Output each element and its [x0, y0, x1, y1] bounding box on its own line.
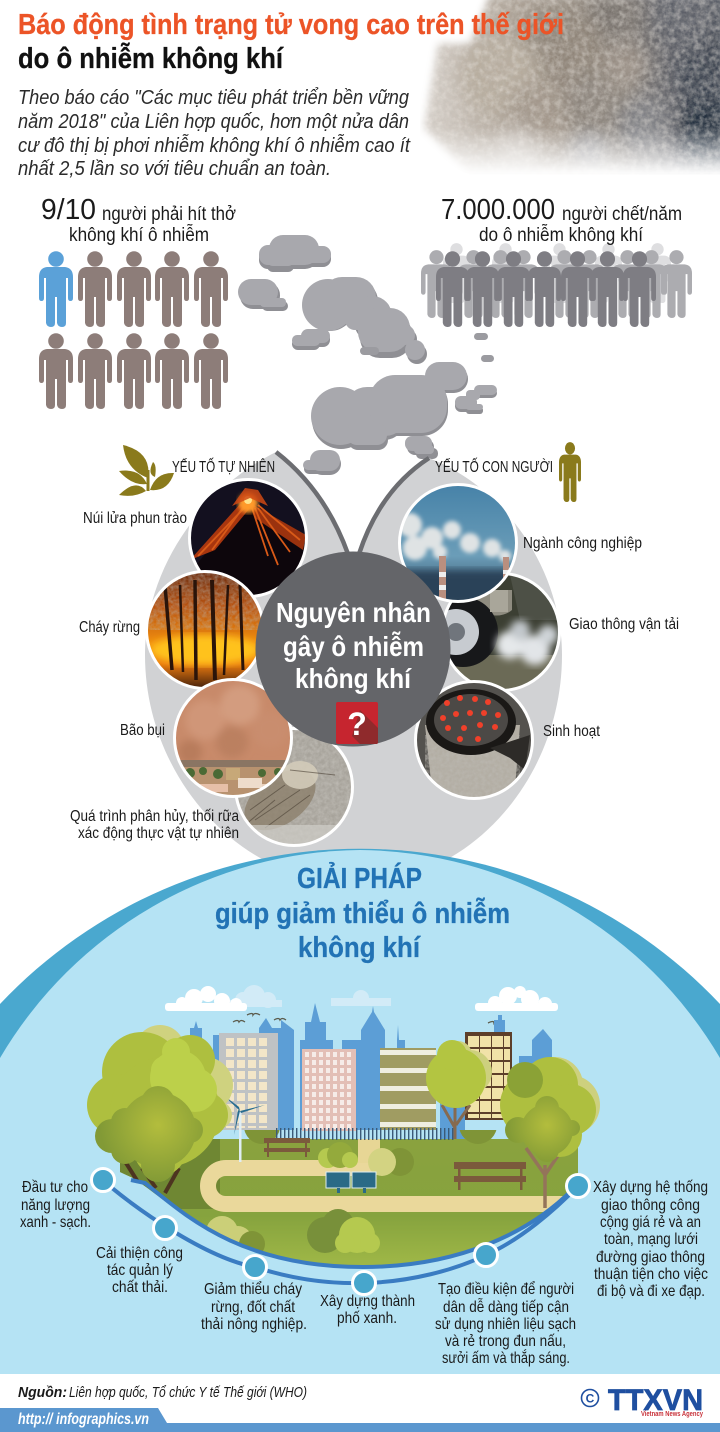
heading: solutions: giúp giảm thiểu ô nhiễm	[215, 896, 510, 930]
text: green city: phố xanh.	[337, 1310, 397, 1327]
text: clean fuels: sưởi ấm và thắp sáng.	[442, 1348, 570, 1367]
hub: central question circle	[256, 552, 450, 746]
footer bar with url: http:// infographics.vn	[18, 1411, 149, 1428]
intro paragraph: năm 2018" của Liên hợp quốc, hơn một nửa dân	[18, 110, 409, 133]
heading: solutions: không khí	[298, 932, 421, 964]
labels: human causes: Ngành công nghiệp	[523, 535, 642, 552]
tree: right	[500, 1057, 600, 1208]
text: green city	[320, 1293, 415, 1327]
labels: human causes	[523, 535, 679, 740]
source: Nguồn:	[18, 1384, 67, 1401]
text: clean fuels: Tạo điều kiện để người	[438, 1280, 574, 1298]
stat: 9/10 people: người phải hít thở	[102, 204, 236, 225]
smoke clouds	[238, 235, 497, 475]
hub: central question circle: gây ô nhiễm	[283, 631, 424, 662]
hub: central question circle: không khí	[295, 663, 412, 694]
logo: TTXVN: Vietnam News Agency	[641, 1409, 704, 1418]
title: do ô nhiễm không khí	[18, 41, 284, 75]
icon: man	[559, 442, 581, 502]
text: waste management	[96, 1245, 183, 1296]
labels: natural causes: Bão bụi	[120, 722, 165, 739]
intro paragraph	[18, 86, 411, 180]
footer bar with url	[0, 1408, 720, 1432]
intro paragraph: Theo báo cáo "Các mục tiêu phát triển bền vững	[18, 86, 410, 109]
node: step 3	[244, 1256, 266, 1278]
illustration: green city	[87, 985, 600, 1279]
ring: dust storm	[174, 680, 292, 796]
ring: car exhaust	[442, 574, 560, 690]
photo: smoke cloud	[420, 0, 720, 175]
stat: 7.000.000 deaths	[441, 194, 682, 246]
intro paragraph: cư đô thị bị phơi nhiễm không khí ô nhiễm cao ít	[18, 134, 411, 157]
stat: 9/10 people: 9/10	[41, 194, 96, 226]
solar panels	[326, 1172, 376, 1193]
text: waste management: Cải thiện công	[96, 1245, 183, 1262]
text: waste management: tác quản lý	[107, 1262, 173, 1279]
text: public transport: giao thông công	[601, 1197, 700, 1214]
stat: 7.000.000 deaths: người chết/năm	[562, 204, 682, 225]
stat: 7.000.000 deaths: do ô nhiễm không khí	[479, 224, 644, 246]
blue skyline	[190, 1003, 574, 1140]
text: public transport: cộng giá rẻ và an	[600, 1214, 701, 1231]
text: clean fuels: sử dụng nhiên liệu sạch	[435, 1316, 576, 1333]
labels: natural causes	[70, 510, 239, 842]
photo: forest fire	[148, 573, 261, 687]
text: clean fuels	[435, 1280, 576, 1367]
stat: 9/10 people: không khí ô nhiễm	[69, 224, 209, 246]
ground	[120, 1130, 578, 1265]
text: green city: Xây dựng thành	[320, 1293, 415, 1310]
labels: natural causes: Cháy rừng	[79, 619, 140, 636]
text: clean energy: xanh - sạch.	[20, 1214, 91, 1231]
ring: factory smoke	[400, 484, 516, 602]
photo: decaying animal	[238, 730, 351, 844]
node: step 4	[352, 1272, 376, 1294]
node: step 6	[566, 1174, 590, 1198]
timeline curve	[103, 1180, 578, 1283]
ring: decaying animal	[236, 728, 352, 846]
hub: central question circle: Nguyên nhân	[276, 597, 431, 628]
buildings	[219, 1032, 512, 1131]
icon: red question mark: ?	[347, 706, 367, 742]
node: step 2	[154, 1216, 176, 1240]
stat: 9/10 people	[41, 194, 236, 246]
text: waste management: chất thải.	[112, 1279, 168, 1296]
photo: car exhaust	[446, 576, 558, 689]
stalk: left	[276, 452, 348, 554]
title	[18, 9, 564, 75]
ring: forest fire	[146, 572, 264, 688]
text: reduce burning: thải nông nghiệp.	[201, 1316, 307, 1333]
labels: natural causes: Quá trình phân hủy, thối rữa	[70, 808, 239, 825]
heading: human factors: YẾU TỐ CON NGƯỜI	[435, 456, 553, 476]
labels: natural causes: Núi lửa phun trào	[83, 510, 187, 527]
footer background	[0, 1374, 720, 1432]
clouds and birds	[165, 985, 558, 1023]
ring: coal stove	[416, 682, 532, 798]
text: reduce burning	[201, 1280, 307, 1333]
photo: coal stove	[417, 683, 531, 797]
text: clean fuels: và rẻ trong đun nấu,	[445, 1333, 566, 1350]
source	[18, 1384, 307, 1401]
ring: volcano	[190, 480, 306, 596]
panel: solutions dome	[0, 849, 720, 1374]
photo: volcano	[191, 481, 305, 595]
wind turbine	[222, 1094, 265, 1162]
intro paragraph: nhất 2,5 lần so với tiêu chuẩn an toàn.	[18, 157, 331, 180]
text: clean energy: Đầu tư cho	[22, 1179, 88, 1196]
node: step 5	[474, 1244, 498, 1266]
text: public transport	[593, 1179, 708, 1300]
title: Báo động tình trạng tử vong cao trên thế giới	[18, 9, 564, 41]
labels: human causes: Sinh hoạt	[543, 723, 601, 740]
logo: TTXVN: TTXVN	[608, 1384, 703, 1417]
background tree	[426, 1040, 492, 1150]
pictogram: crowd	[421, 243, 692, 327]
benches	[264, 1138, 526, 1190]
heading: natural factors: YẾU TỐ TỰ NHIÊN	[172, 456, 275, 476]
text: public transport: toàn, mạng lưới	[604, 1231, 698, 1248]
panel: causes grey backdrop	[145, 452, 562, 875]
source: Liên hợp quốc, Tổ chức Y tế Thế giới (WHO)	[69, 1384, 307, 1401]
text: clean fuels: dân dễ dàng tiếp cận	[443, 1297, 569, 1316]
text: clean energy: năng lượng	[21, 1197, 90, 1214]
labels: natural causes: xác động thực vật tự nhiên	[78, 825, 239, 842]
text: reduce burning: Giảm thiểu cháy	[204, 1280, 302, 1298]
photo: factory smoke	[401, 486, 515, 600]
fence	[274, 1128, 455, 1140]
heading: solutions	[215, 861, 510, 964]
node: step 1	[92, 1168, 114, 1192]
bushes	[318, 1142, 414, 1176]
stat: 7.000.000 deaths: 7.000.000	[441, 194, 555, 226]
stalk: right	[359, 458, 429, 554]
text: reduce burning: rừng, đốt chất	[211, 1299, 295, 1316]
text: clean energy	[20, 1179, 91, 1231]
tree: left big	[87, 1025, 233, 1193]
pictogram: 10 people, 1 blue	[39, 251, 228, 409]
text: public transport: đường giao thông	[596, 1249, 705, 1266]
icon: red question mark	[336, 702, 378, 744]
photo: dust storm	[176, 681, 290, 795]
heading: solutions: GIẢI PHÁP	[297, 861, 422, 895]
labels: human causes: Giao thông vận tải	[569, 616, 679, 633]
icon: plant	[119, 445, 174, 496]
logo: TTXVN: C	[586, 1392, 595, 1406]
